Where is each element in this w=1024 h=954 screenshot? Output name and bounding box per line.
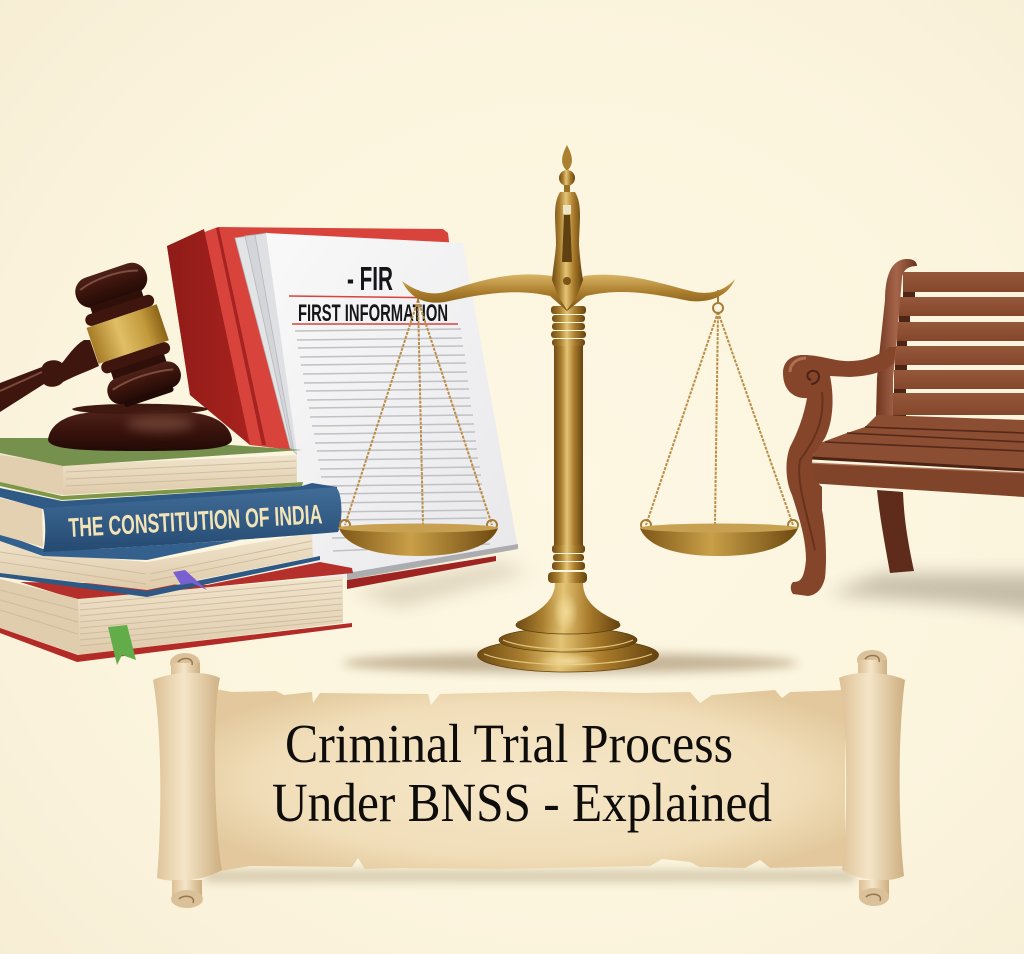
back slats <box>892 272 1024 415</box>
gavel head <box>70 258 186 412</box>
right pan <box>640 524 798 556</box>
left roller <box>153 653 222 908</box>
floor shadows <box>342 562 1024 673</box>
left pan <box>338 524 498 556</box>
sound block <box>48 404 232 451</box>
document text lines <box>295 329 490 551</box>
central spindle and finial <box>552 145 583 310</box>
balance scale <box>338 145 798 672</box>
gavel and sound block <box>0 258 232 451</box>
seat top <box>812 415 1024 470</box>
red rule bottom <box>292 323 458 325</box>
red binder <box>167 227 496 589</box>
FIR document and red binder <box>167 227 518 589</box>
top green book <box>0 438 303 500</box>
title <box>272 713 772 833</box>
FIR heading: - FIR <box>347 260 393 297</box>
stack of law books <box>0 438 353 665</box>
back leg <box>877 490 914 573</box>
purple bookmark <box>173 570 207 590</box>
beam <box>402 274 735 311</box>
armrest and front leg <box>783 347 896 596</box>
book title: THE CONSTITUTION OF INDIA <box>68 499 323 543</box>
stacked page edges <box>235 233 300 456</box>
hook rings <box>340 290 798 530</box>
gavel handle <box>0 340 99 412</box>
right chains <box>646 312 793 525</box>
FIRST INFORMATION heading: FIRST INFORMATION <box>298 300 448 327</box>
base <box>478 583 658 672</box>
right roller <box>839 650 905 906</box>
column and rings <box>548 306 587 583</box>
FIR paper sheet <box>266 233 518 578</box>
title scroll banner <box>153 650 905 908</box>
bottom red book <box>0 562 353 665</box>
banner shadow <box>205 870 855 882</box>
Constitution of India book <box>0 483 341 552</box>
parchment sheet <box>215 689 845 872</box>
seat front rail <box>808 463 1024 497</box>
bench <box>783 259 1024 596</box>
back post <box>876 259 917 416</box>
title: Criminal Trial Process <box>285 713 733 774</box>
green bookmark <box>108 625 136 665</box>
dark gaps at post <box>892 292 915 417</box>
red rule top <box>289 296 453 298</box>
left chains <box>345 300 492 525</box>
title: Under BNSS - Explained <box>272 772 772 833</box>
third blue book <box>0 533 320 597</box>
